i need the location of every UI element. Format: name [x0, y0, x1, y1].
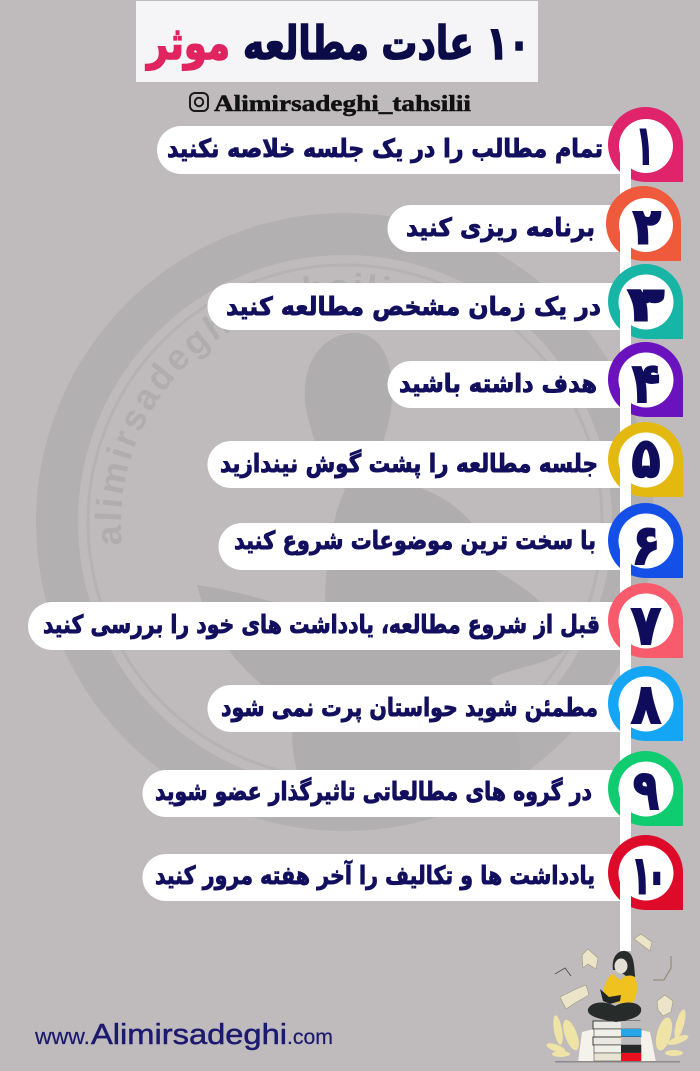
item 3 badge — [608, 264, 683, 340]
flying books — [560, 934, 673, 1016]
item 7 pill — [28, 602, 620, 650]
item 4 badge: ۴ — [632, 351, 660, 415]
pen left — [555, 968, 571, 976]
illustration: girl reading on books — [545, 934, 690, 1062]
item 2 pill — [387, 205, 620, 252]
item 10 pill: یادداشت ها و تکالیف را آخر هفته مرور کنید — [155, 860, 595, 891]
item 4 badge — [608, 342, 683, 418]
item 8 badge — [608, 666, 683, 742]
item 4 pill — [387, 361, 620, 408]
item 8 badge: ۸ — [631, 672, 661, 736]
item 5 badge: ۵ — [632, 426, 660, 490]
white paper shapes — [578, 1028, 656, 1062]
item 5 badge — [608, 422, 683, 498]
pen right — [653, 956, 671, 980]
item 9 badge — [608, 751, 683, 827]
item 5 pill: جلسه مطالعه را پشت گوش نیندازید — [220, 449, 598, 479]
item 1 pill: تمام مطالب را در یک جلسه خلاصه نکنید — [167, 134, 603, 163]
open book — [600, 989, 621, 1004]
face — [614, 958, 628, 974]
item 10 badge: ۱۰ — [634, 848, 664, 904]
instagram handle: Alimirsadeghi_tahsilii — [214, 91, 472, 116]
item 2 badge — [606, 186, 681, 262]
item 4 pill: هدف داشته باشید — [399, 369, 597, 398]
item 10 pill — [142, 854, 620, 901]
item 9 pill — [142, 770, 620, 817]
book stack — [593, 1021, 641, 1061]
item 1 badge: ۱ — [638, 118, 652, 174]
crossed legs — [588, 1002, 641, 1022]
title box — [136, 1, 538, 82]
torso yellow — [603, 974, 637, 1003]
item 2 pill: برنامه ریزی کنید — [406, 213, 595, 243]
ground line — [555, 1061, 680, 1062]
item 6 badge — [608, 503, 683, 579]
website suffix: .com — [287, 1026, 333, 1049]
hair — [613, 951, 635, 979]
item 7 badge — [608, 583, 683, 659]
item 10 badge — [608, 835, 683, 911]
website footer: www. — [34, 1024, 90, 1049]
watermark seal: alimirsadeghi_tahsili — [95, 273, 390, 544]
item 2 badge: ۲ — [634, 199, 660, 255]
item 1 badge — [608, 107, 683, 183]
item 8 pill — [208, 685, 620, 732]
item 6 badge: ۶ — [632, 513, 660, 577]
icon: instagram — [190, 93, 208, 111]
item 5 pill — [208, 441, 620, 488]
laurel leaves — [545, 1008, 690, 1057]
item 9 badge: ۹ — [633, 758, 659, 822]
website name: Alimirsadeghi — [91, 1019, 287, 1051]
item 1 pill — [157, 126, 620, 174]
vertical connector line — [620, 170, 631, 951]
item 3 pill: در یک زمان مشخص مطالعه کنید — [226, 292, 601, 321]
item 3 badge: ۳ — [628, 277, 664, 331]
item 6 pill: با سخت ترین موضوعات شروع کنید — [234, 526, 596, 556]
title dark text: ۱۰ عادت مطالعه — [243, 16, 530, 70]
item 3 pill — [208, 283, 620, 330]
item 8 pill: مطمئن شوید حواستان پرت نمی شود — [221, 693, 598, 723]
title accent text: موثر — [145, 16, 230, 70]
item 6 pill — [218, 523, 620, 570]
item 9 pill: در گروه های مطالعاتی تاثیرگذار عضو شوید — [155, 777, 592, 807]
item 7 badge: ۷ — [631, 593, 661, 657]
watermark seal — [36, 213, 654, 831]
